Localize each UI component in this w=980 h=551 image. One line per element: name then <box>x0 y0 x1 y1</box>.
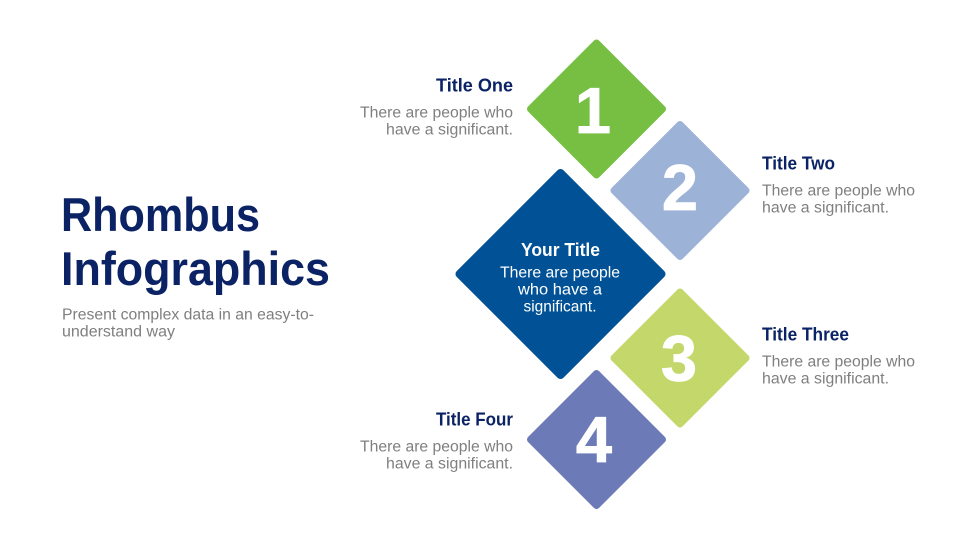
center text: There are people <box>500 264 620 282</box>
text block: title three: Title Three <box>762 324 849 344</box>
text block: title four: There are people who <box>360 438 513 456</box>
text block: title two <box>762 154 915 216</box>
text block: title one: Title One <box>436 76 513 96</box>
panel: rhombus 2 <box>614 124 746 256</box>
title: Rhombus <box>61 188 260 241</box>
text block: title three: have a significant. <box>762 370 889 388</box>
text block: title two: have a significant. <box>762 200 889 216</box>
center text: significant. <box>524 298 596 316</box>
panel: rhombus 4 <box>530 374 662 506</box>
panel: rhombus 1 <box>530 43 662 175</box>
text block: title four <box>360 410 513 472</box>
number 1: 1 <box>575 74 611 147</box>
text block: title four: have a significant. <box>386 456 513 472</box>
text block: title one: There are people who <box>360 104 513 122</box>
text block: title one: have a significant. <box>386 122 513 138</box>
center heading: Your Title <box>521 240 600 260</box>
center text: who have a <box>517 282 602 298</box>
subtitle <box>62 306 314 340</box>
title: Infographics <box>61 242 330 295</box>
subtitle: understand way <box>62 324 175 340</box>
panel: center rhombus <box>460 173 662 375</box>
title <box>61 188 330 295</box>
text block: title three: There are people who <box>762 354 915 370</box>
subtitle: Present complex data in an easy-to- <box>62 306 314 324</box>
center text <box>500 264 620 316</box>
number 2: 2 <box>662 151 698 224</box>
text block: title four: Title Four <box>436 410 513 430</box>
text block: title two: There are people who <box>762 182 915 200</box>
text block: title three <box>762 324 915 388</box>
panel: rhombus 3 <box>614 292 746 424</box>
number 4: 4 <box>576 403 612 476</box>
number 3: 3 <box>661 322 697 395</box>
text block: title two: Title Two <box>762 154 835 174</box>
text block: title one <box>360 76 513 138</box>
